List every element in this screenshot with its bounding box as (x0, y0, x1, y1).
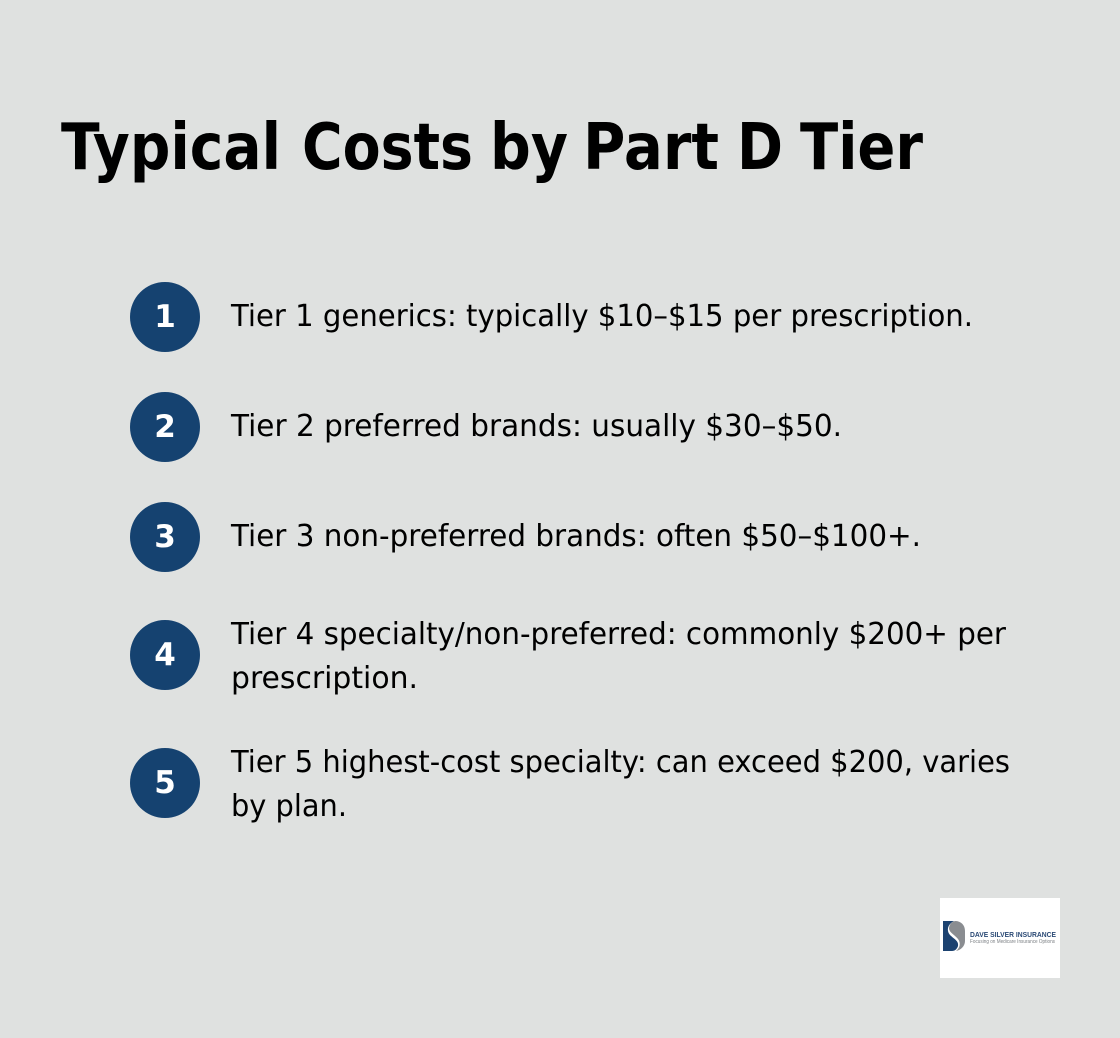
text: tier 5: Tier 5 highest-cost specialty: can exceed $200, varies (230, 745, 1010, 780)
title: Part (583, 111, 719, 185)
title: by (490, 111, 568, 185)
logo: Dave Silver Insurance (940, 898, 1060, 978)
text: tier 1: Tier 1 generics: typically $10–$15 per prescription. (230, 299, 973, 334)
title (61, 111, 923, 185)
title: Tier (800, 111, 923, 185)
logo name: DAVE SILVER INSURANCE (970, 930, 1056, 939)
text: tier 4 (230, 617, 1007, 696)
number badge 1: 1 (154, 299, 176, 335)
title: Costs (302, 111, 473, 185)
text: tier 3: Tier 3 non-preferred brands: often $50–$100+. (230, 519, 921, 554)
list item 3 (130, 502, 921, 572)
text: tier 4: Tier 4 specialty/non-preferred: commonly $200+ per (230, 617, 1007, 652)
logo background (940, 898, 1060, 978)
text: tier 5 (230, 745, 1010, 824)
number badge 2 (130, 392, 200, 462)
logo tagline: Focusing on Medicare Insurance Options (970, 939, 1055, 945)
number badge 1 (130, 282, 200, 352)
number badge 3 (130, 502, 200, 572)
number badge 5 (130, 748, 200, 818)
number badge 2: 2 (154, 409, 176, 445)
text: tier 4: prescription. (231, 661, 418, 696)
text: tier 5: by plan. (231, 789, 347, 824)
number badge 4: 4 (154, 637, 176, 673)
list item 5 (130, 745, 1010, 824)
title: D (737, 111, 783, 185)
title: Typical (61, 111, 281, 185)
icon: S mark (943, 921, 965, 951)
list item 4 (130, 617, 1007, 696)
number badge 5: 5 (154, 765, 176, 801)
number badge 3: 3 (154, 519, 176, 555)
number badge 4 (130, 620, 200, 690)
list item 1 (130, 282, 973, 352)
text: tier 2: Tier 2 preferred brands: usually $30–$50. (230, 409, 842, 444)
list item 2 (130, 392, 842, 462)
